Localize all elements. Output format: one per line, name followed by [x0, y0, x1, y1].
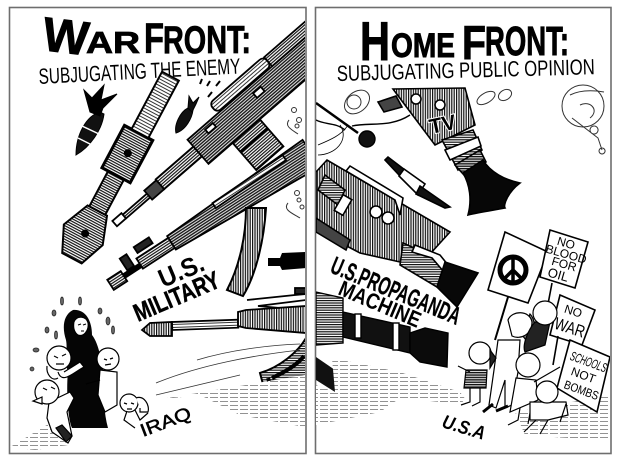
label: U.S. military	[132, 258, 218, 322]
video camcorder	[316, 160, 478, 307]
heading: war front: W	[40, 8, 92, 67]
heading: war front: RONT:	[163, 19, 251, 62]
woman in black abaya	[64, 310, 108, 428]
protester woman with sign	[483, 313, 534, 412]
heading: home front: F	[462, 16, 486, 69]
protest sign: no blood for oil: NO	[556, 234, 577, 252]
label: U.S. military: U.S.	[154, 248, 209, 294]
rifle one	[111, 20, 305, 228]
protest sign: no blood for oil	[539, 229, 589, 302]
child left crying	[47, 346, 84, 379]
swirling flourishes	[344, 88, 512, 114]
heading: home front	[362, 22, 567, 60]
label: U.S. propaganda machine: MACHINE	[335, 276, 425, 333]
black rifle end	[268, 252, 306, 270]
protester child center	[508, 353, 560, 425]
child right	[98, 347, 120, 413]
protester kid in back	[524, 301, 557, 352]
panel: home front	[316, 8, 611, 454]
protest sign: no war: WAR	[552, 314, 587, 342]
protest sign: no blood for oil: FOR	[550, 254, 579, 274]
microphone and cord	[316, 103, 410, 155]
protest sign: no war: NO	[563, 302, 584, 321]
label: U.S. military: MILITARY	[129, 266, 224, 328]
curved magazine	[227, 208, 266, 296]
rifle three	[142, 288, 306, 336]
panel: war front	[8, 6, 307, 454]
label: U.S.A: U.S.A	[440, 412, 488, 445]
protest sign: peace symbol	[488, 232, 548, 340]
exhaust puffs	[286, 108, 304, 218]
fear marks	[30, 297, 114, 371]
label: TV: TV	[427, 111, 458, 139]
protester boy left	[458, 342, 496, 406]
icon: spinning globe scribble	[562, 85, 605, 154]
protest sign: schools not bombs: NOT	[569, 364, 598, 386]
lower lens	[316, 292, 448, 367]
heading: home front: OME	[391, 27, 455, 65]
ground slab	[316, 357, 335, 392]
child crawling	[120, 394, 148, 428]
ground hatching	[10, 344, 305, 450]
ground hatching	[316, 358, 611, 441]
lower magazine	[258, 338, 305, 382]
protest sign: no blood for oil: BLOOD	[544, 242, 589, 267]
rifle two	[106, 138, 305, 292]
protest sign: no blood for oil: OIL	[546, 265, 570, 285]
TV camera	[378, 88, 520, 215]
heading: war front	[44, 16, 248, 55]
rocket launcher	[61, 70, 180, 265]
subheading: subjugating the enemy: SUBJUGATING THE ENEMY	[38, 53, 241, 89]
heading: war front: F	[144, 15, 164, 63]
icon: large falling bomb	[76, 85, 117, 155]
heading: home front: H	[360, 10, 390, 72]
microphone clip	[385, 157, 450, 208]
protest sign: schools not bombs: BOMBS	[562, 378, 601, 403]
label: U.S. propaganda machine	[331, 256, 460, 328]
protester child right	[524, 381, 568, 434]
heading: war front: AR	[86, 25, 140, 60]
protest sign: schools not bombs	[557, 340, 610, 412]
heading: home front: RONT:	[485, 18, 569, 64]
icon: small falling bomb	[176, 79, 220, 133]
label: Iraq: IRAQ	[137, 403, 194, 441]
child front left	[33, 380, 74, 443]
label: U.S. propaganda machine: U.S.PROPAGANDA	[327, 252, 465, 331]
protest sign: no war	[550, 295, 595, 365]
